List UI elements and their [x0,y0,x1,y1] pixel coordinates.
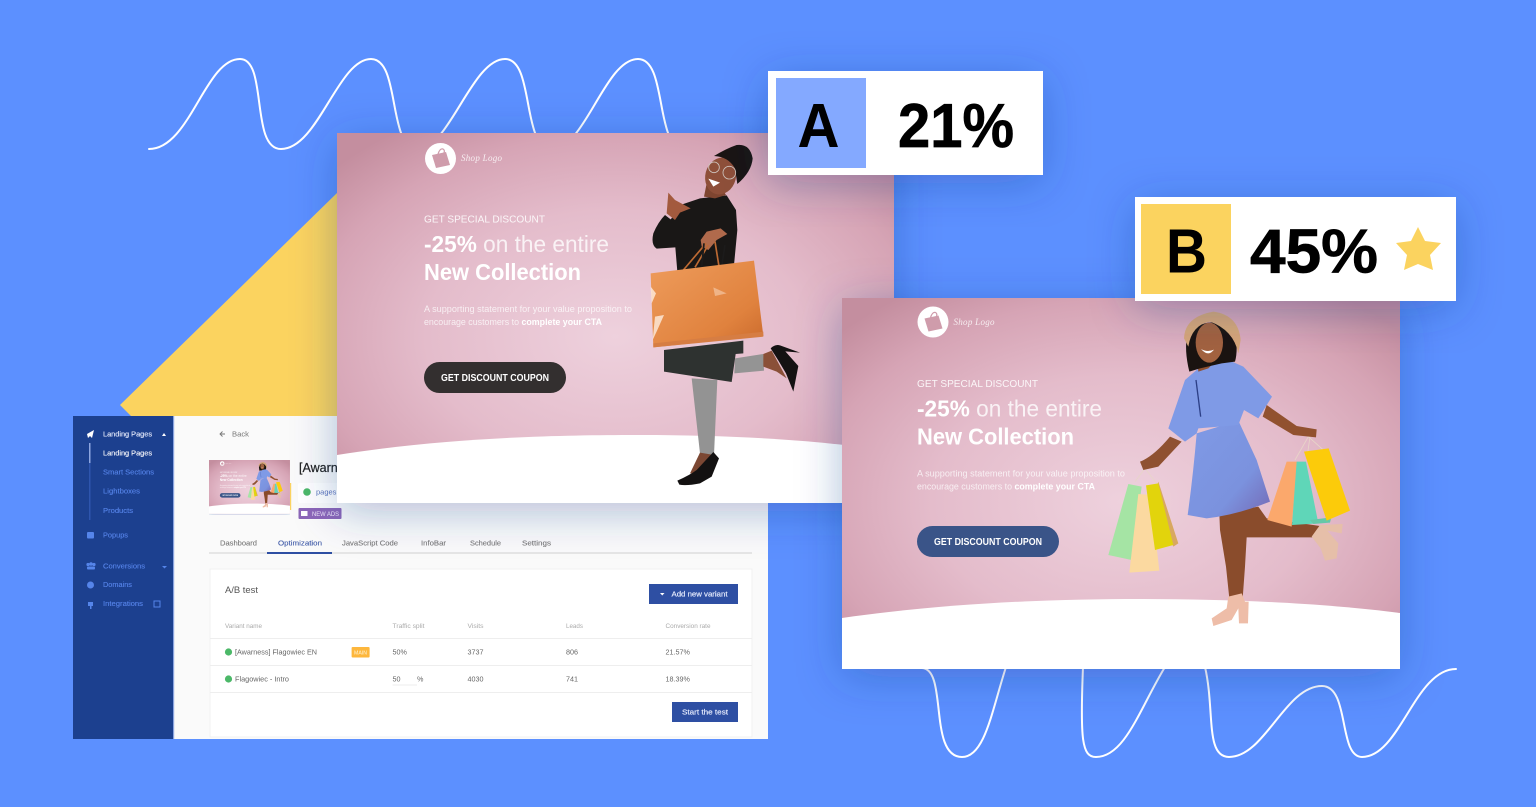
table row: variant A: 50% [392,648,407,656]
page url box: pages.landingi.com [316,488,381,496]
table header: Traffic split [392,624,425,630]
logo: Shop Logo [461,153,502,163]
tag: new ads [298,508,342,519]
letter B tile: B [1166,218,1207,287]
table row: variant A: 806 [566,648,578,656]
sidebar menu [103,430,154,608]
headline text [917,378,1125,492]
yellow triangle [120,193,337,416]
page url box [303,488,336,496]
headline text: A supporting statement for your value proposition to [917,468,1125,480]
headline text: -25% on the entire [424,231,609,257]
badge: variant A result [768,71,1043,175]
table row: variant B: % [417,674,424,684]
panel: landing page variant A [337,133,894,503]
table row: variant A: [Awarness] Flagowiec EN [235,648,317,656]
table header: Conversion rate [666,624,711,630]
tabs [209,538,752,554]
woman with colourful bags [1108,312,1350,626]
value 21%: 21% [898,92,1014,161]
headline text: New Collection [424,259,581,285]
tabs: Schedule [470,538,501,548]
thumbnail of variant B [209,460,290,515]
table row: variant B: 741 [566,674,578,684]
headline text: -25% on the entire [917,396,1102,422]
button: discount coupon [917,526,1059,557]
table header: Leads [566,624,583,630]
table row: variant B: 50 [392,674,400,684]
value 45%: 45% [1250,218,1378,287]
icon: paper plane [87,430,94,438]
top squiggle line [149,59,685,149]
table header: Visits [468,624,484,630]
sidebar icons [86,433,167,609]
headline text: encourage customers to complete your CTA [424,317,602,328]
button: discount coupon: GET DISCOUNT COUPON [441,373,549,384]
headline text [424,214,632,328]
sidebar menu: Landing Pages [103,448,152,458]
letter B tile [1141,204,1231,294]
button: discount coupon: GET DISCOUNT COUPON [934,537,1042,548]
button: add new variant: Add new variant [672,590,728,598]
table row: variant B [225,674,690,686]
logo [918,306,995,338]
panel: sidebar [73,416,174,739]
heading: A/B test: A/B test [225,585,258,596]
table row: variant B: Flagowiec - Intro [235,674,289,684]
back link [220,431,249,437]
tabs: Dashboard [220,538,257,548]
button: add new variant [649,584,738,604]
badge: variant B result [1135,197,1456,301]
table row: variant B: 18.39% [666,674,690,684]
sidebar menu: Smart Sections [103,468,154,476]
sidebar menu: Integrations [103,599,143,608]
page title: [Awarness] Flagowiec EN [299,461,441,475]
table row: variant A: 3737 [468,648,484,656]
headline text: encourage customers to complete your CTA [917,482,1095,492]
panel: landing page variant B [842,298,1400,669]
sidebar menu: Products [103,506,133,515]
panel: app dashboard [73,416,768,739]
table header [225,624,711,630]
tag: new ads: NEW ADS [312,512,339,518]
tabs: Settings [522,538,551,548]
tabs: Optimization [278,538,322,548]
headline text: GET SPECIAL DISCOUNT [917,378,1039,390]
tabs: JavaScript Code [342,538,398,548]
letter A tile [776,78,866,168]
sidebar menu: Lightboxes [103,486,140,496]
bottom squiggle line [922,667,1456,757]
table row: variant B: 4030 [468,674,484,684]
woman with orange bag [651,145,800,485]
logo: Shop Logo [954,317,995,327]
headline text: New Collection [917,424,1074,450]
table row: variant A [225,647,690,658]
table row: variant A: 21.57% [666,648,690,656]
table header: Variant name [225,624,263,630]
letter A tile: A [798,92,840,161]
icon: star [1396,227,1441,270]
table row: variant A: MAIN [354,650,367,656]
sidebar menu: Conversions [103,562,145,570]
sidebar menu: Popups [103,530,128,540]
button: discount coupon [424,362,566,393]
yellow edge behind thumbnail [290,483,291,510]
panel: A/B test table [210,569,752,737]
button: start the test [672,702,738,722]
logo [425,143,502,174]
headline text: A supporting statement for your value proposition to [424,304,632,315]
sidebar menu: Landing Pages [103,430,152,438]
back link: Back [232,430,249,438]
headline text: GET SPECIAL DISCOUNT [424,214,546,226]
button: start the test: Start the test [682,708,728,716]
sidebar menu: Domains [103,580,132,589]
tabs: InfoBar [421,538,447,548]
